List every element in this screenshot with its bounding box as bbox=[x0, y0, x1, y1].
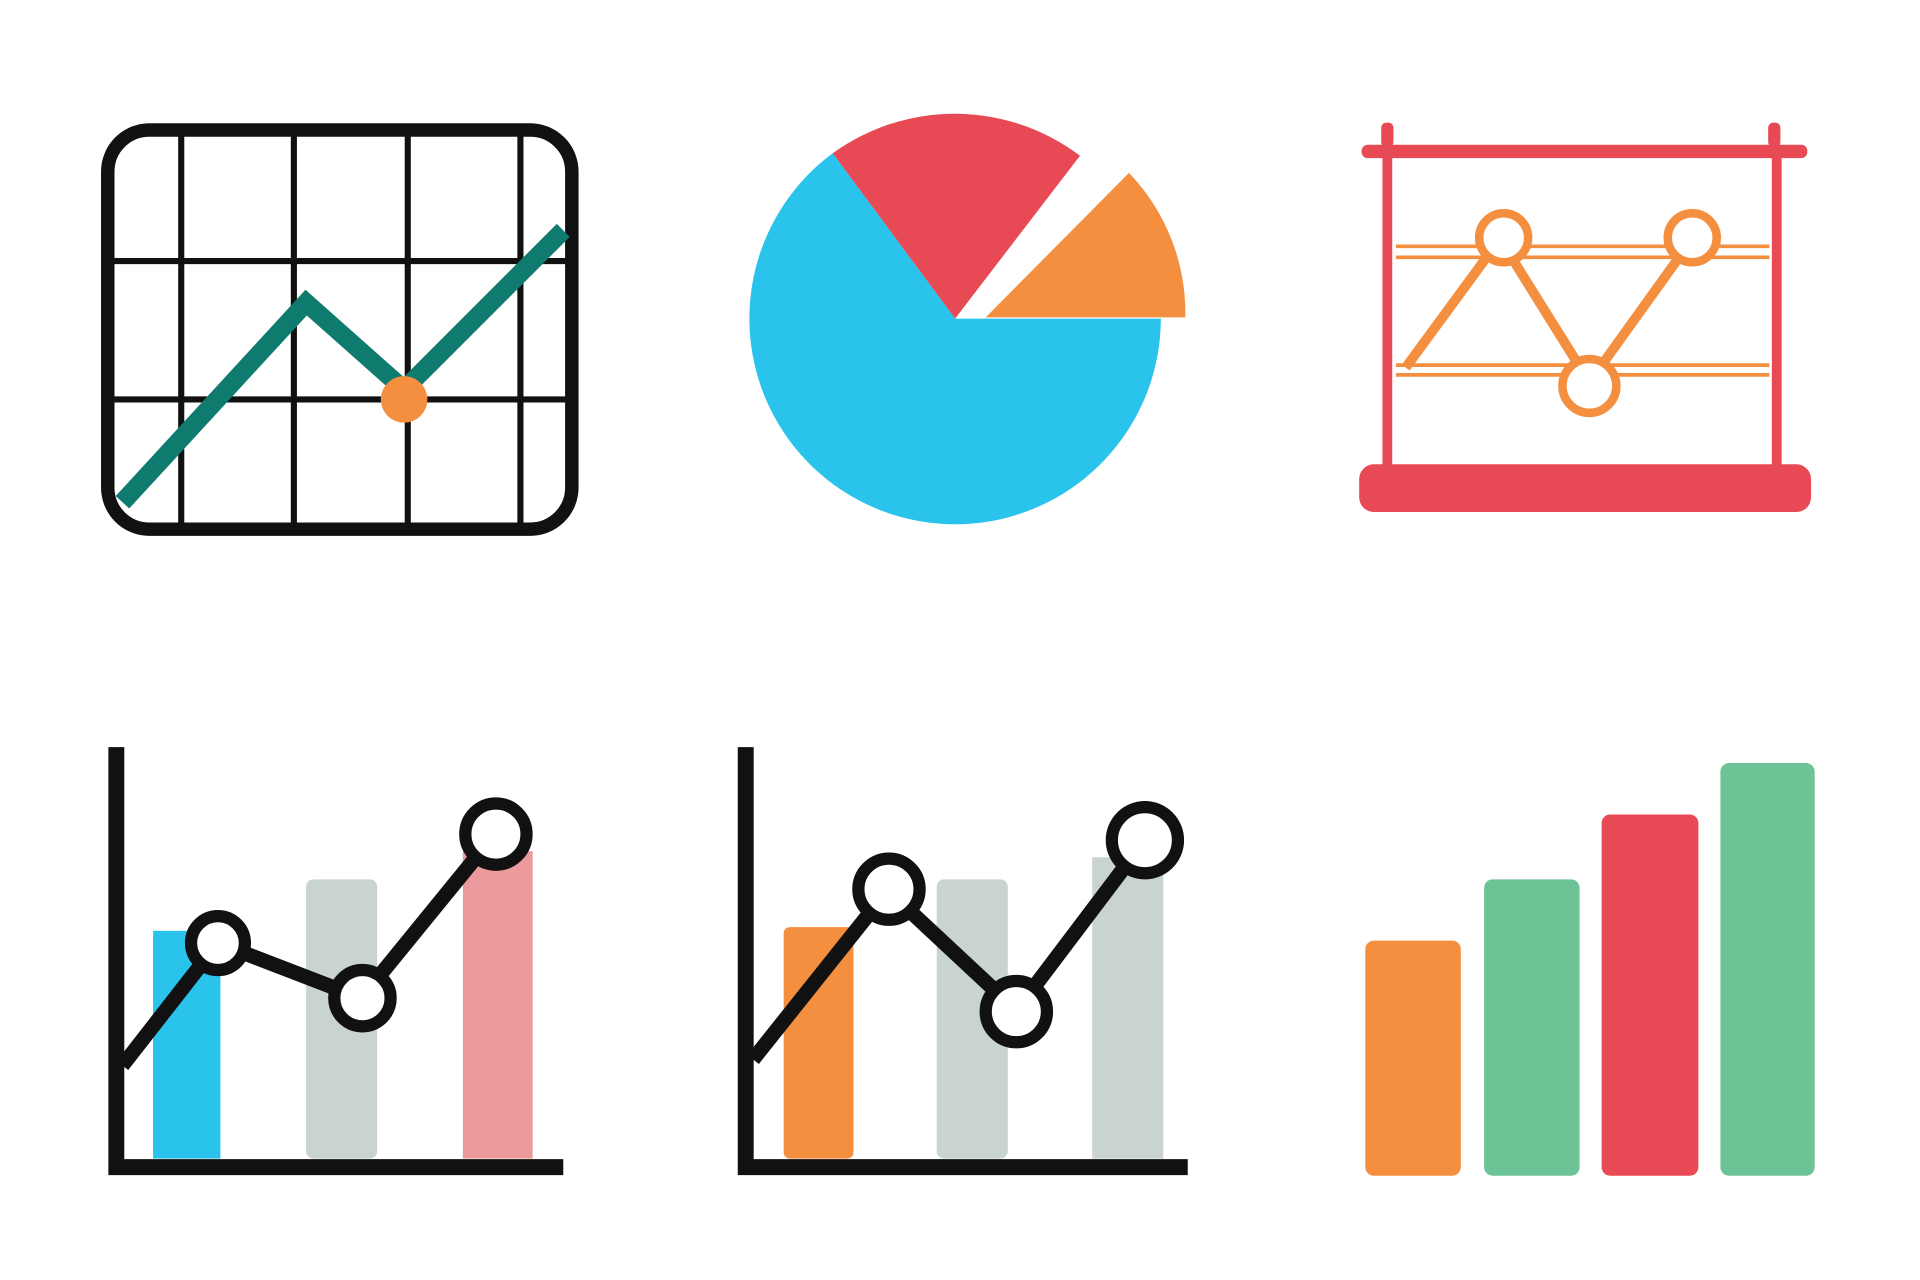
guide lines bbox=[1396, 246, 1769, 375]
board top bar bbox=[1362, 145, 1807, 158]
blue slice bbox=[749, 153, 1161, 524]
icon: bar and line chart (orange/grey) bbox=[746, 747, 1188, 1167]
icon: pie chart bbox=[749, 114, 1185, 524]
orange slice bbox=[986, 173, 1185, 317]
trend line bbox=[122, 230, 563, 502]
icon: presentation board chart bbox=[1359, 123, 1811, 512]
posts bbox=[1383, 157, 1391, 468]
icon: bar and line chart (blue/grey/pink) bbox=[116, 747, 563, 1167]
bottom bar bbox=[1359, 464, 1811, 512]
icon: grid line chart bbox=[108, 130, 572, 529]
red slice bbox=[833, 114, 1080, 319]
line bbox=[1406, 239, 1692, 382]
data dot bbox=[381, 376, 427, 423]
icon: colored bar chart bbox=[1365, 763, 1815, 1176]
